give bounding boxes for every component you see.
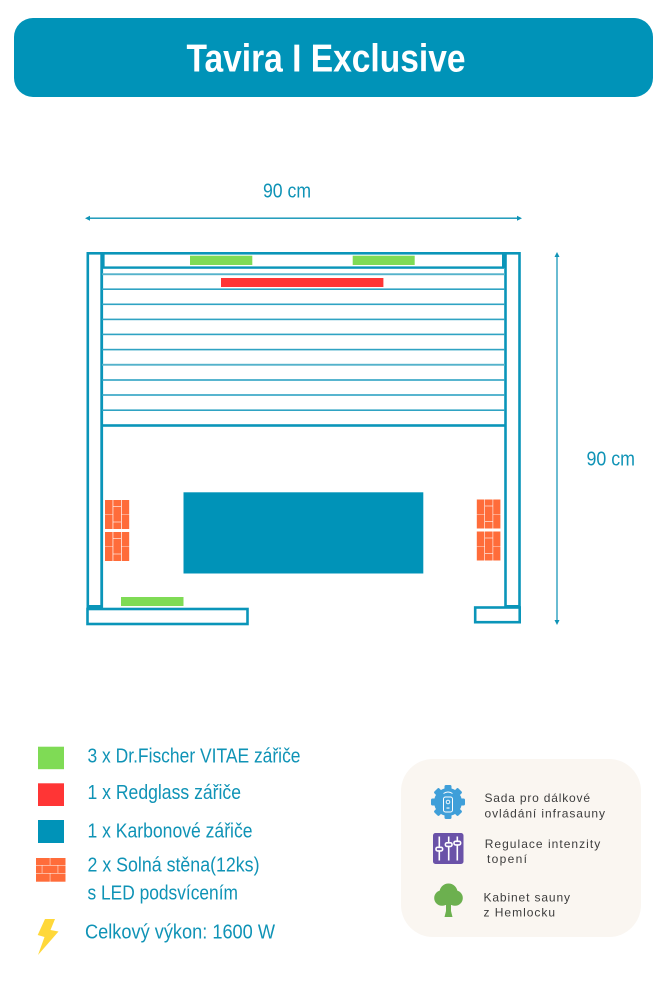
width dimension [85,180,522,221]
legend: total power: Celkový výkon: 1600 W [85,922,275,944]
title banner [14,18,653,97]
Redglass heater [221,278,383,287]
text: intensity regulation: Regulace intenzity [485,837,600,851]
title banner: Tavira I Exclusive [186,38,466,80]
text: hemlock cabin [484,891,570,920]
height dimension: 90 cm [586,448,635,470]
text: intensity regulation: topení [487,852,528,866]
legend: salt wall [36,854,260,904]
text: remote control: ovládání infrasauny [484,807,605,821]
text: hemlock cabin: z Hemlocku [484,906,555,920]
features panel [401,759,641,937]
front wall left [88,609,248,624]
salt wall right [477,500,500,560]
legend: Redglass heater [38,782,241,806]
text: remote control: Sada pro dálkové [484,791,590,805]
legend: VITAE heaters [38,746,300,769]
icon: intensity sliders [433,833,464,864]
legend: Redglass heater: 1 x Redglass zářiče [88,782,241,804]
sauna walls [86,252,521,608]
legend: salt wall: 2 x Solná stěna(12ks) [88,854,260,876]
text: intensity regulation [485,837,600,866]
carbon heater [184,492,423,574]
width dimension: 90 cm [263,180,311,202]
legend: carbon heater: 1 x Karbonové zářiče [88,820,252,842]
icon: remote control gear [431,785,465,819]
Dr.Fischer VITAE heater, back right [353,256,415,265]
front wall right [475,608,520,622]
legend: VITAE heaters: 3 x Dr.Fischer VITAE zářiče [88,746,300,768]
legend: salt wall: s LED podsvícením [88,882,238,904]
legend [36,746,300,955]
floor plan [86,252,521,624]
Dr.Fischer VITAE heater, front [121,597,184,606]
text: hemlock cabin: Kabinet sauny [484,891,570,905]
icon: tree [434,884,463,917]
bench slats [102,273,505,411]
height dimension [554,252,635,625]
text: remote control [484,791,605,821]
Dr.Fischer VITAE heater, back left [190,256,252,265]
salt wall left [105,500,129,561]
legend: carbon heater [38,820,252,843]
legend: total power [38,919,275,955]
